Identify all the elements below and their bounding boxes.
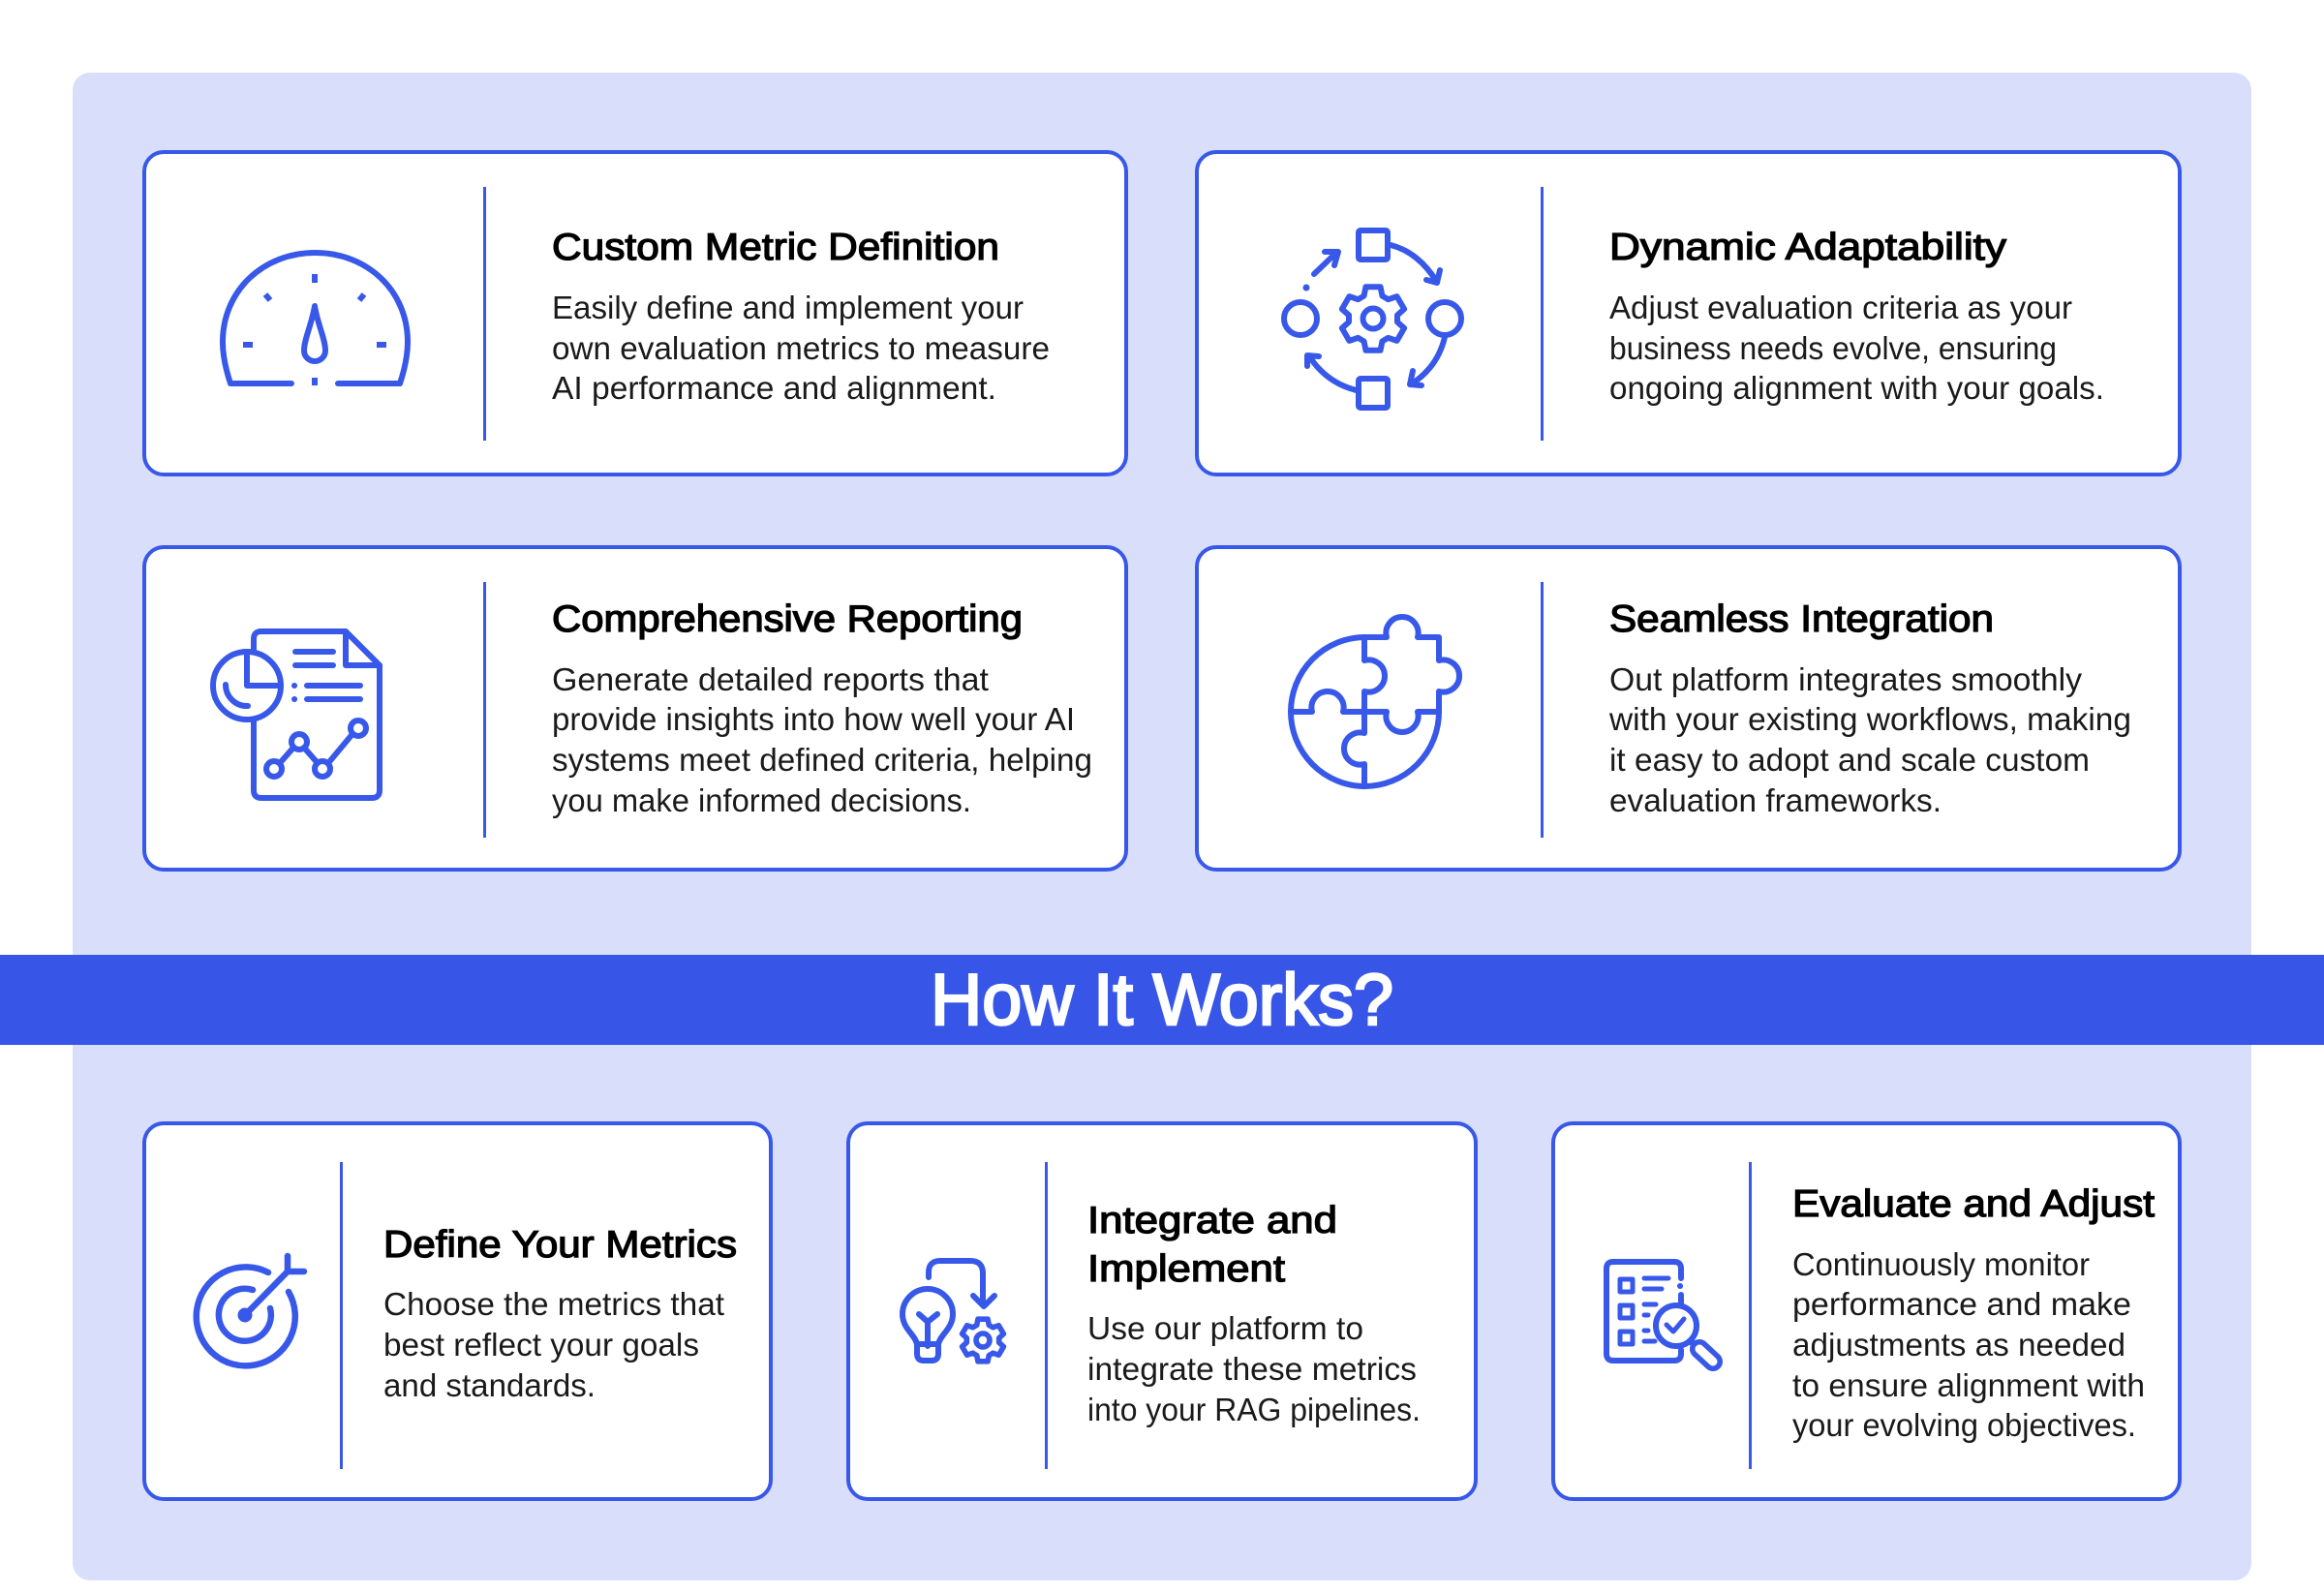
description: adjustments as needed [1792, 1327, 2125, 1363]
description [383, 1286, 724, 1403]
divider [1541, 187, 1544, 441]
banner: How It Works? [0, 955, 2324, 1045]
icon: gauge [223, 253, 408, 385]
icon: adaptive cycle with gear [1284, 230, 1461, 408]
card: Comprehensive Reporting [144, 547, 1126, 870]
divider [1045, 1162, 1048, 1469]
card: Dynamic Adaptability [1197, 152, 2180, 475]
description: AI performance and alignment. [552, 370, 996, 406]
description [1609, 290, 2104, 406]
icon: lightbulb and gear [902, 1261, 1003, 1362]
description [552, 290, 1050, 406]
description: Adjust evaluation criteria as your [1609, 290, 2072, 325]
step card: Evaluate and Adjust [1553, 1123, 2180, 1499]
description: Choose the metrics that [383, 1286, 724, 1322]
card frame [144, 1123, 771, 1499]
heading: Evaluate and Adjust [1792, 1183, 2155, 1225]
description: it easy to adopt and scale custom [1609, 742, 2090, 778]
description: best reflect your goals [383, 1327, 699, 1363]
banner heading: How It Works? [931, 959, 1393, 1040]
step card: Define Your Metrics [144, 1123, 771, 1499]
icon: puzzle pieces [1291, 617, 1459, 786]
heading: Comprehensive Reporting [552, 598, 1023, 640]
card frame [848, 1123, 1476, 1499]
description: with your existing workflows, making [1608, 701, 2131, 737]
heading: Custom Metric Definition [552, 227, 999, 268]
description [1792, 1246, 2145, 1443]
description: to ensure alignment with [1792, 1367, 2145, 1403]
description: evaluation frameworks. [1609, 782, 1942, 818]
card frame [1553, 1123, 2180, 1499]
description: performance and make [1792, 1286, 2131, 1322]
description [552, 661, 1092, 818]
description: own evaluation metrics to measure [552, 330, 1050, 366]
divider [1541, 582, 1544, 838]
divider [340, 1162, 343, 1469]
description: provide insights into how well your AI [552, 701, 1075, 737]
banner bar [0, 955, 2324, 1045]
description: ongoing alignment with your goals. [1609, 370, 2104, 406]
description: Generate detailed reports that [552, 661, 989, 697]
description [1608, 661, 2131, 818]
description: Continuously monitor [1792, 1246, 2090, 1282]
step card: Integrate and Implement [848, 1123, 1476, 1499]
heading: Implement [1087, 1248, 1285, 1290]
card: Seamless Integration [1197, 547, 2180, 870]
description: systems meet defined criteria, helping [552, 742, 1092, 778]
description: into your RAG pipelines. [1087, 1392, 1421, 1427]
heading: Define Your Metrics [383, 1224, 737, 1266]
description [1087, 1310, 1421, 1427]
icon: target [197, 1256, 304, 1365]
description: and standards. [383, 1367, 596, 1403]
card frame [144, 547, 1126, 870]
description: your evolving objectives. [1792, 1407, 2136, 1443]
description: Out platform integrates smoothly [1609, 661, 2083, 697]
heading [1087, 1200, 1337, 1290]
description: business needs evolve, ensuring [1609, 330, 2057, 366]
card frame [1197, 152, 2180, 475]
card frame [1197, 547, 2180, 870]
card frame [144, 152, 1126, 475]
description: integrate these metrics [1087, 1351, 1417, 1387]
description: you make informed decisions. [552, 782, 971, 818]
divider [483, 187, 486, 441]
icon: checklist with magnifier [1606, 1262, 1713, 1362]
card: Custom Metric Definition [144, 152, 1126, 475]
description: Use our platform to [1087, 1310, 1363, 1346]
description: Easily define and implement your [552, 290, 1024, 325]
heading: Integrate and [1087, 1200, 1337, 1241]
heading: Dynamic Adaptability [1609, 227, 2007, 268]
heading: Seamless Integration [1609, 598, 1994, 640]
divider [1749, 1162, 1752, 1469]
divider [483, 582, 486, 838]
icon: report document [213, 631, 380, 798]
